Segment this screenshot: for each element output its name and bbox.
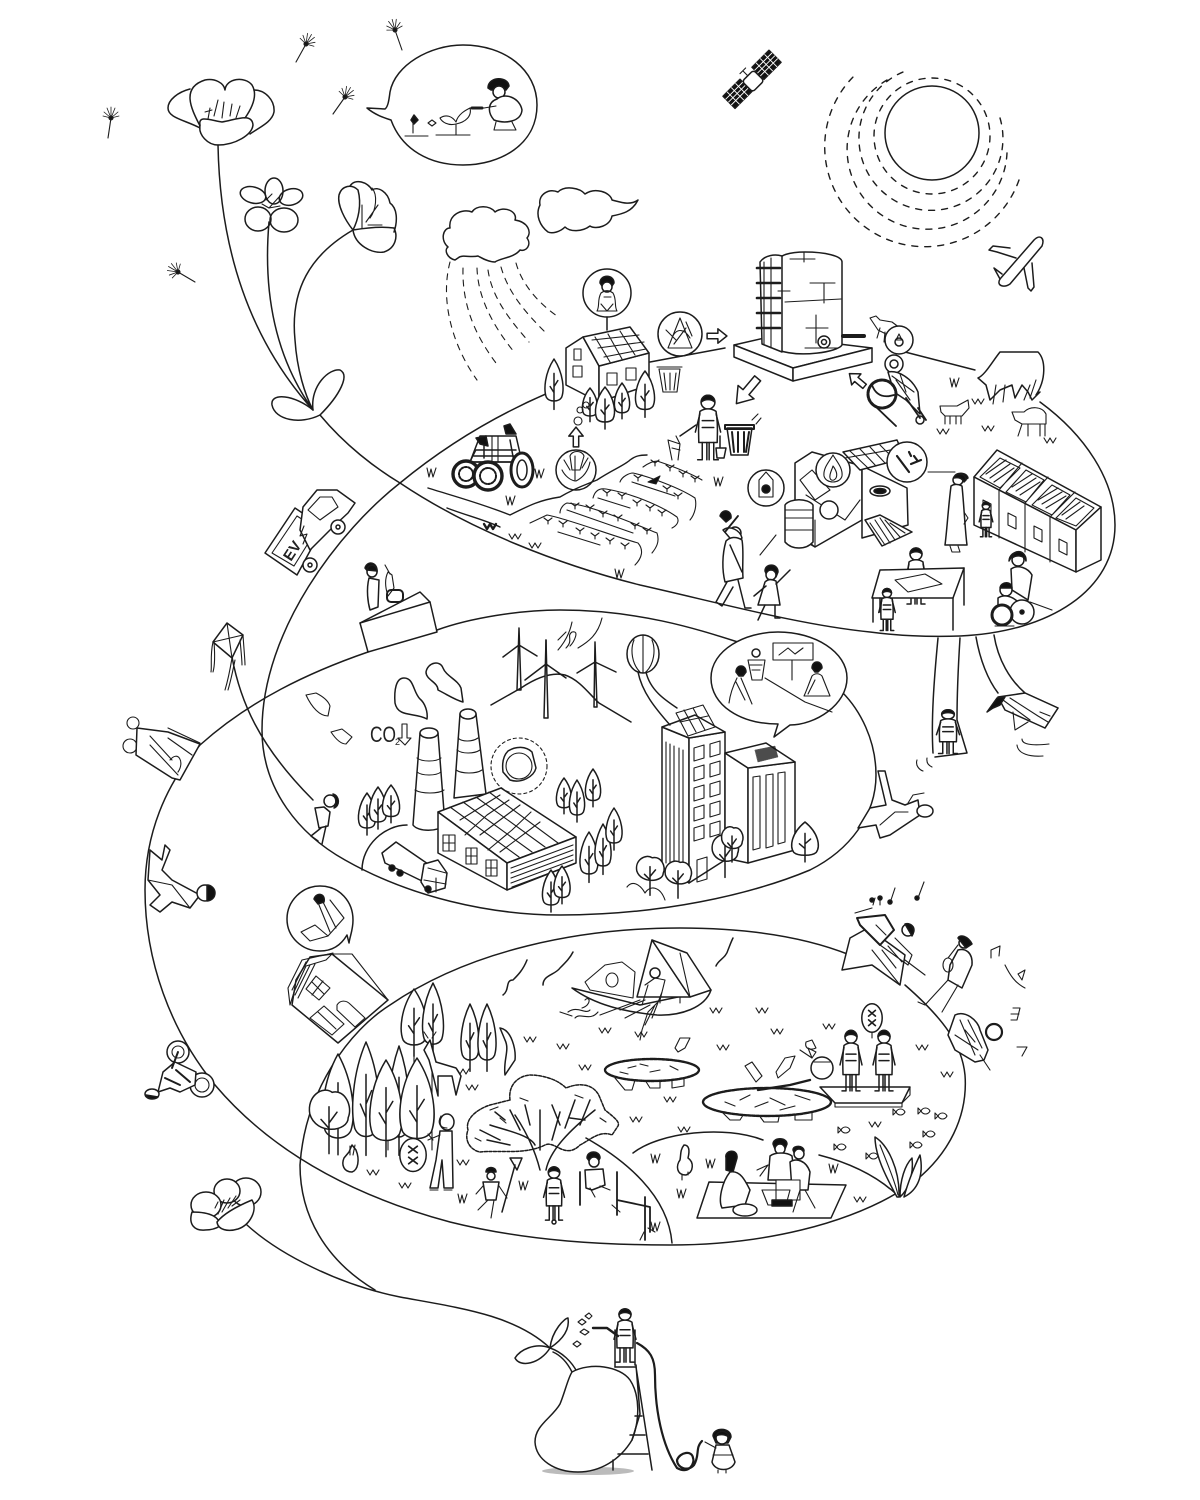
swing with child bbox=[917, 638, 967, 771]
sun with dashed rays bbox=[825, 72, 1019, 247]
forest bbox=[309, 983, 496, 1157]
bench with person bbox=[580, 1152, 655, 1240]
kid with net bbox=[476, 1158, 522, 1218]
sprout leaves bbox=[515, 1318, 577, 1372]
panel: farm and home lobe bbox=[427, 252, 1101, 630]
musician on chair bbox=[842, 882, 925, 985]
goat and lamb bbox=[940, 400, 1046, 436]
large tree bbox=[467, 1075, 618, 1170]
cow bbox=[978, 352, 1044, 404]
person walking dog bbox=[668, 395, 726, 460]
trees right of factory bbox=[542, 769, 622, 912]
airplane bbox=[989, 237, 1043, 291]
carer and wheelchair bbox=[992, 552, 1052, 626]
icon circles: fuel, flame, tools bbox=[748, 442, 927, 506]
balloon with tube bbox=[627, 635, 677, 725]
mango body bbox=[535, 1366, 638, 1472]
feed and fish shapes bbox=[675, 1038, 810, 1090]
trees at city base bbox=[627, 822, 818, 900]
arrows around tank bbox=[569, 368, 869, 447]
child at machines bbox=[979, 502, 993, 537]
field grass and track bbox=[427, 455, 723, 578]
icon circle: person on roof bbox=[583, 269, 631, 330]
rain dashed lines bbox=[446, 262, 560, 380]
gulls bbox=[503, 938, 733, 995]
child at hose end bbox=[705, 1429, 735, 1473]
icon bubble: person with laptop bbox=[287, 886, 353, 951]
factory building bbox=[438, 788, 576, 890]
water plant bbox=[875, 1137, 921, 1197]
kite and string bbox=[211, 623, 313, 800]
main flowing path lines bbox=[145, 352, 1115, 1290]
kite flyer bbox=[311, 794, 338, 844]
bin dark bbox=[725, 414, 761, 455]
pig and drop circle bbox=[870, 316, 913, 354]
music notes bbox=[991, 946, 1027, 1056]
birds and CO2 label: CO bbox=[370, 722, 396, 747]
trees left of factory bbox=[358, 785, 400, 835]
flower: lower left bbox=[191, 1178, 550, 1348]
ladder bbox=[613, 1330, 652, 1470]
trees around house bbox=[545, 359, 654, 429]
cyclist bbox=[145, 1041, 214, 1099]
stall with kids bbox=[360, 563, 437, 652]
road and truck bbox=[362, 825, 447, 893]
deer bbox=[424, 1032, 461, 1096]
recycling icon circle with arrow bbox=[650, 312, 727, 362]
birds and CO2 label bbox=[306, 693, 411, 747]
flower stems and sprout bbox=[218, 145, 353, 420]
slide with child bbox=[976, 635, 1058, 756]
panel: energy and city lobe bbox=[306, 618, 847, 912]
tractor bbox=[453, 424, 533, 490]
man with coin bubble bbox=[400, 1114, 454, 1190]
outdoor kitchen building bbox=[795, 440, 912, 547]
small fish near shore bbox=[834, 1108, 947, 1159]
satellite bbox=[720, 47, 782, 109]
woman at recycling machines bbox=[945, 473, 968, 552]
guitarist bbox=[918, 936, 972, 1012]
crop rows bbox=[530, 460, 702, 565]
flower: side view bbox=[339, 182, 396, 252]
flower: five petal bbox=[238, 178, 305, 232]
duck bbox=[678, 1145, 692, 1180]
child standing bbox=[544, 1167, 564, 1224]
lawn arcs bbox=[586, 1132, 895, 1243]
small water drops bbox=[574, 402, 589, 425]
wind turbines on hill bbox=[491, 618, 631, 722]
bin bbox=[657, 367, 682, 392]
EV truck: EV bbox=[280, 538, 305, 564]
gardener with hose bbox=[573, 1309, 636, 1362]
rabbit bbox=[343, 1145, 358, 1172]
boat bbox=[560, 940, 711, 1040]
picnic blanket and people bbox=[697, 1139, 846, 1218]
second building bbox=[725, 743, 795, 863]
flower: large poppy bbox=[168, 79, 274, 145]
birds and CO2 label: 2 bbox=[395, 737, 400, 747]
speech bubble: gardener bbox=[367, 45, 537, 165]
runner bbox=[148, 845, 215, 912]
water ripples and grass bbox=[367, 1008, 953, 1231]
chimneys bbox=[413, 709, 486, 830]
reader with magnifier bbox=[948, 1014, 1002, 1070]
EV truck bbox=[265, 490, 355, 575]
fish cages bbox=[605, 1059, 831, 1122]
recycling machines bbox=[974, 450, 1101, 572]
solar tower bbox=[662, 705, 725, 883]
cottage bbox=[288, 953, 388, 1043]
clouds bbox=[443, 188, 638, 262]
house with solar roof bbox=[566, 327, 649, 402]
short line cues bbox=[760, 472, 955, 555]
mango with ladder and gardener bbox=[515, 1309, 735, 1475]
grass tufts near animals bbox=[937, 378, 1056, 443]
panel: nature and fisheries lobe bbox=[309, 938, 953, 1243]
recycle ring bbox=[491, 738, 547, 794]
meeting speech bubble bbox=[711, 632, 847, 737]
ground shadow bbox=[542, 1467, 634, 1475]
platform with workers bbox=[800, 1004, 910, 1107]
hose bbox=[637, 1343, 702, 1470]
table with people bbox=[872, 548, 964, 630]
water tank on platform bbox=[734, 252, 872, 381]
barrel bbox=[785, 500, 813, 548]
person tumbling on lobe edge bbox=[858, 771, 933, 838]
stroller parents bbox=[123, 717, 200, 780]
adult carrying child and kid waving bbox=[716, 511, 790, 620]
bird on reed bbox=[500, 1028, 515, 1075]
dandelion seeds bbox=[103, 17, 403, 282]
icon circle: seedlings bbox=[556, 450, 596, 490]
smoke clouds bbox=[395, 663, 463, 719]
person on farm bike bbox=[868, 355, 926, 426]
